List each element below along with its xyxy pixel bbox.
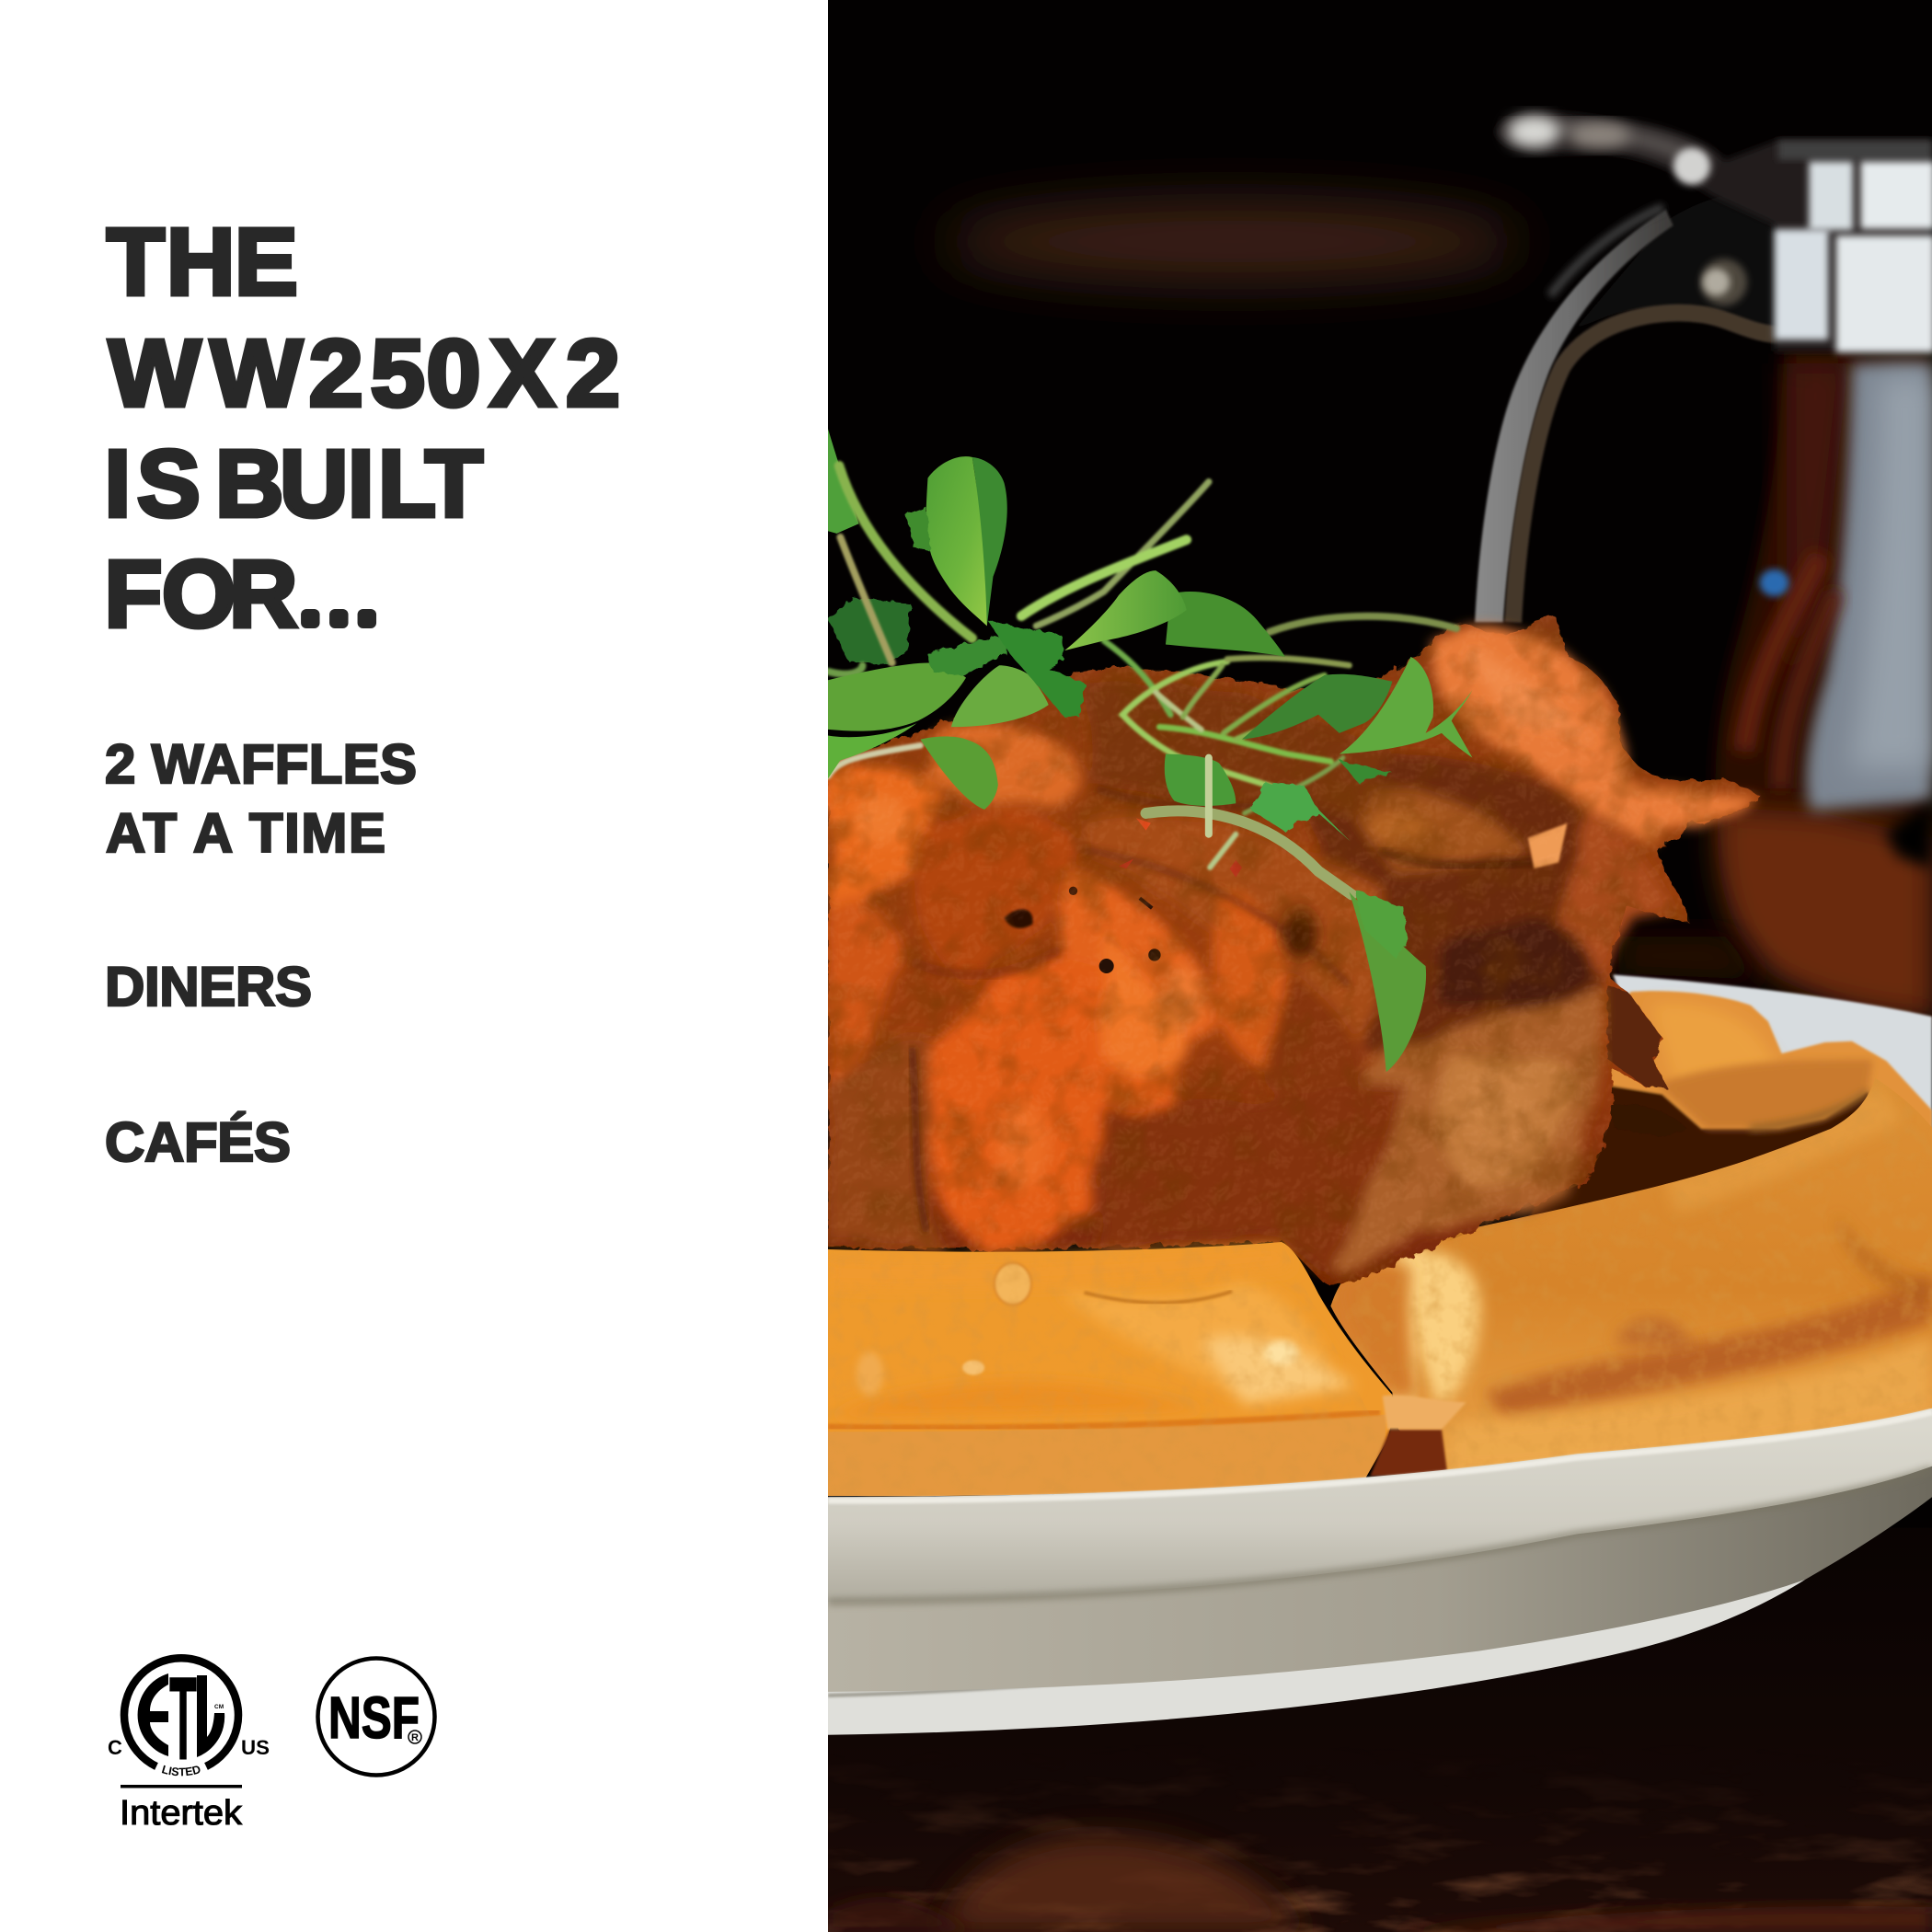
leaf: twin leaf [1064, 570, 1285, 657]
icon: ETL listed Intertek certification mark: Intertek [120, 1794, 243, 1833]
dispenser glass body [1716, 351, 1932, 1017]
title [92, 216, 620, 639]
photo: fried chicken on a waffle on a white plate [828, 0, 1932, 1932]
dark frill crust [1610, 1103, 1686, 1137]
leaf: lower centre leaf [951, 665, 1049, 727]
microgreens garnish [828, 429, 1472, 1072]
text: cafes: CAFÉS [105, 1111, 291, 1173]
icon: NSF certification mark [316, 1656, 437, 1777]
text: 2 waffles at a time: AT A TIME [106, 802, 385, 864]
dispenser handle [1577, 192, 1799, 335]
title: ... [303, 573, 374, 635]
title: WW250X2 [109, 320, 620, 427]
icon: ETL listed Intertek certification mark: US [241, 1736, 270, 1759]
icon: ETL listed Intertek certification mark: T [169, 1653, 197, 1785]
left waffle [828, 1242, 1466, 1496]
leaf: left wide leaf [828, 663, 966, 731]
leaf: small centre leaves [1165, 754, 1350, 840]
plate foot [828, 1580, 1805, 1735]
back waffle [1528, 991, 1932, 1220]
photo background [828, 0, 1932, 1932]
leaf: cilantro behind [926, 635, 1006, 675]
syrup dispenser [1475, 113, 1932, 1017]
icon: ETL listed Intertek certification mark: LISTED [162, 1765, 201, 1776]
fried chicken [828, 615, 1759, 1284]
leaf: far left sprig [828, 429, 858, 534]
leaf: right pointed leaf [1242, 657, 1472, 782]
panel: white text column [0, 0, 828, 1932]
plate [828, 1409, 1932, 1735]
leaf: centre cilantro [987, 620, 1086, 717]
leaf: large upright leaf [905, 456, 1007, 626]
dispenser lid and lever [1496, 113, 1932, 351]
icon: ETL listed Intertek certification mark [108, 1653, 270, 1833]
chicken colour lobes [828, 628, 1755, 1269]
text: 2 waffles at a time: 2 WAFFLES [105, 733, 417, 795]
garnish stems [828, 466, 1456, 868]
plate rim [828, 1409, 1932, 1602]
icon: ETL listed Intertek certification mark: C [108, 1736, 122, 1759]
plate body [828, 1466, 1932, 1692]
leaf: dark cilantro sprig [828, 598, 911, 665]
icon: ETL listed Intertek certification mark: CM [214, 1704, 224, 1710]
chicken surface details [854, 788, 1568, 1232]
icon: NSF certification mark: R [411, 1732, 419, 1743]
plate back rim [1613, 974, 1932, 1146]
leaf: bottom left pale leaf [828, 723, 916, 778]
leaf: long curled leaf [1146, 758, 1426, 1072]
waffle seam [1370, 1430, 1448, 1476]
leaf: small oval leaf [920, 737, 998, 810]
table top [828, 1581, 1932, 1932]
text: 2 waffles at a time [105, 733, 417, 864]
right waffle [1330, 1060, 1932, 1478]
text: diners: DINERS [105, 957, 312, 1018]
